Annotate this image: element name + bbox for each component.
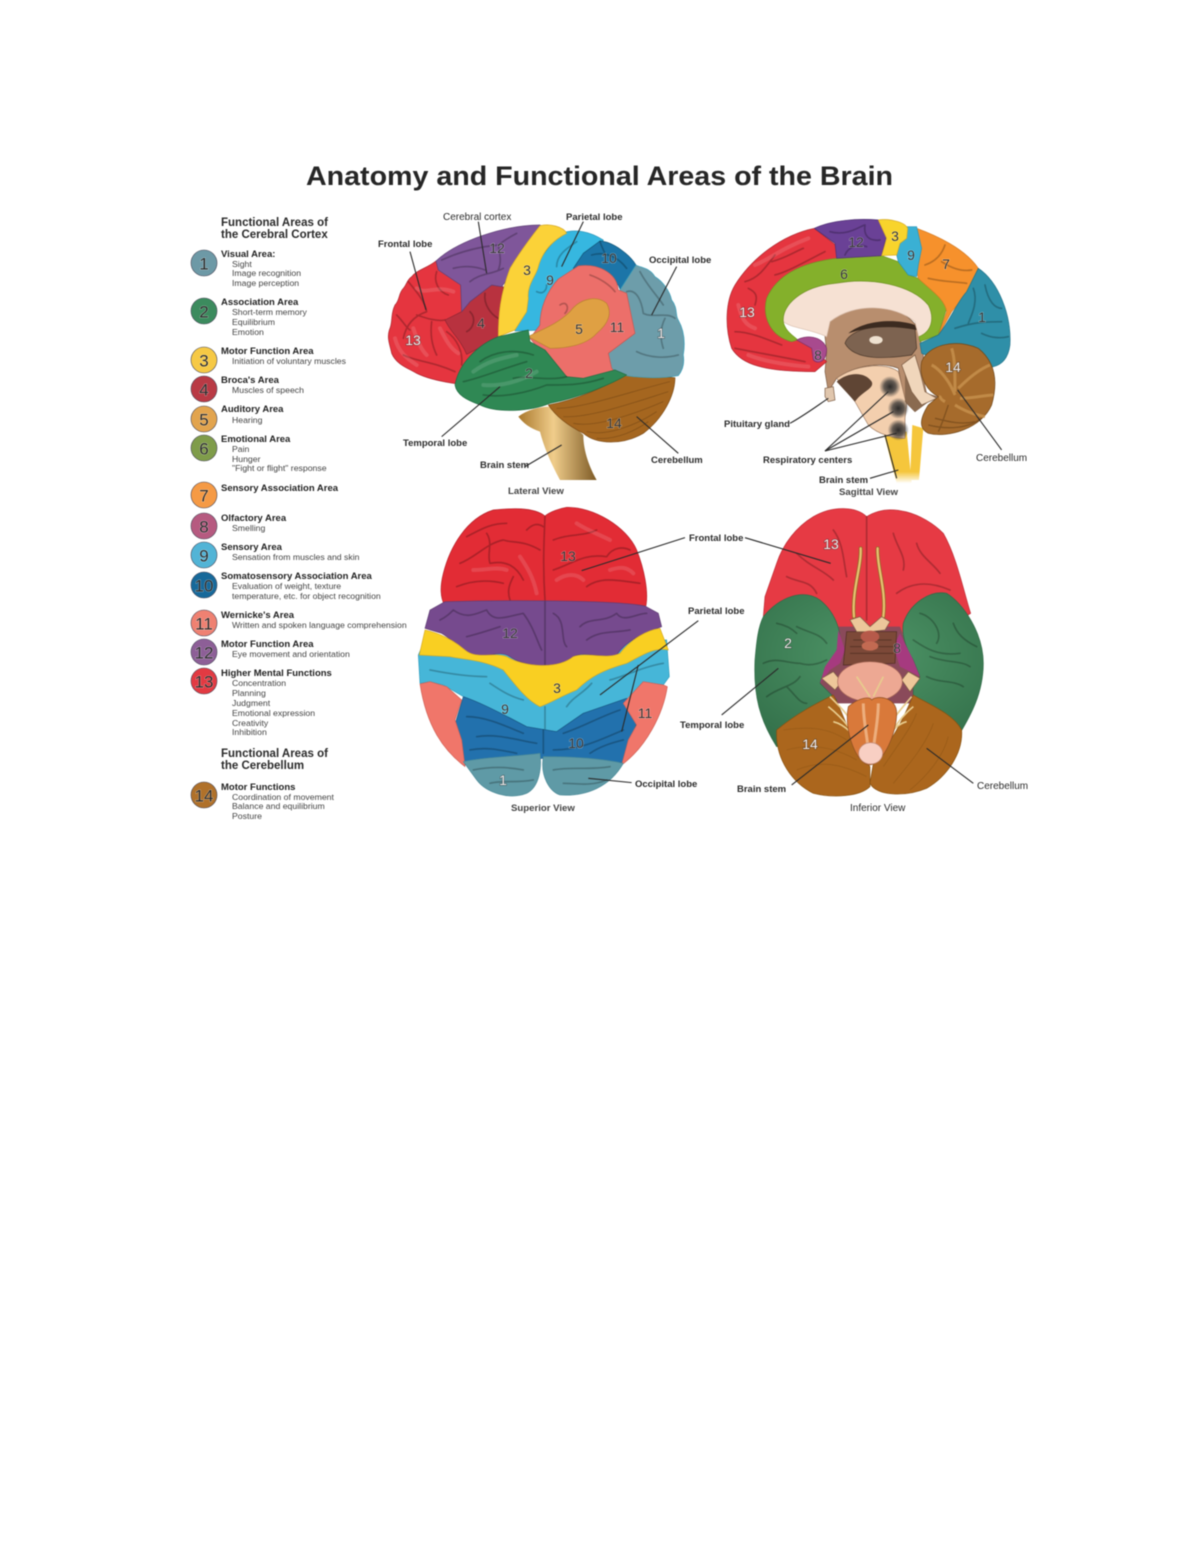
superior labels: Superior View xyxy=(511,803,575,814)
legend item 1: Image perception xyxy=(232,278,299,288)
legend item 13 xyxy=(191,668,332,737)
legend item 11 xyxy=(191,610,407,636)
olfactory region 8 xyxy=(820,630,920,683)
legend item 12: Motor Function Area xyxy=(221,639,314,650)
legend item 13: Judgment xyxy=(232,698,271,708)
legend item 2: Short-term memory xyxy=(232,307,307,317)
legend item 13: Planning xyxy=(232,688,266,698)
legend item 1: Visual Area: xyxy=(221,249,275,260)
motor region 12 xyxy=(425,601,662,665)
legend item 2: 2 xyxy=(199,302,209,322)
inferior labels: Cerebellum xyxy=(977,781,1028,792)
spinal cord xyxy=(883,425,923,483)
legend heading: cerebellum: the Cerebellum xyxy=(221,760,304,772)
legend item 1 xyxy=(191,249,301,288)
superior numbers: 1 xyxy=(499,772,507,788)
Wernicke region 11 xyxy=(530,266,635,379)
lateral labels: Cerebral cortex xyxy=(443,212,511,223)
center underlay xyxy=(819,627,921,703)
legend item 11: Wernicke's Area xyxy=(221,610,295,621)
emotional region 6 xyxy=(765,256,947,342)
inferior view brain xyxy=(722,509,1028,814)
legend item 7 xyxy=(191,482,339,508)
legend item 4: Muscles of speech xyxy=(232,385,304,395)
sagittal labels: Pituitary gland xyxy=(724,419,790,430)
brainstem pons xyxy=(837,366,907,438)
lateral numbers: 11 xyxy=(610,319,624,335)
sensory region 9 xyxy=(418,640,669,732)
frontal region 13 xyxy=(763,509,971,633)
superior labels xyxy=(511,533,744,814)
legend item 2: Association Area xyxy=(221,297,299,308)
superior view brain xyxy=(418,507,744,814)
legend item 5: 5 xyxy=(199,410,209,430)
legend: functional areas key xyxy=(191,217,407,821)
inferior leader lines xyxy=(722,538,973,785)
superior labels: Frontal lobe xyxy=(689,533,743,544)
sagittal numbers: 12 xyxy=(848,234,864,250)
sagittal numbers: 1 xyxy=(978,309,986,325)
legend item 13: Concentration xyxy=(232,678,286,688)
olfactory region 8 xyxy=(797,337,827,362)
legend item 14: Motor Functions xyxy=(221,782,295,793)
olfactory tracts xyxy=(854,548,884,617)
legend item 10: Somatosensory Association Area xyxy=(221,571,373,582)
superior numbers: 12 xyxy=(502,625,518,641)
legend item 6: 6 xyxy=(199,440,209,458)
legend item 8: Smelling xyxy=(232,523,265,533)
pituitary gland xyxy=(825,387,835,402)
sagittal leader lines xyxy=(790,390,1002,478)
legend item 14: Posture xyxy=(232,811,262,821)
legend heading: cerebral cortex: the Cerebral Cortex xyxy=(221,229,328,241)
legend item 3: 3 xyxy=(199,352,209,370)
inferior labels: Brain stem xyxy=(737,784,786,795)
legend item 6: Pain xyxy=(232,444,250,454)
frontal region 13 xyxy=(441,507,647,610)
legend item 13: Emotional expression xyxy=(232,708,315,718)
lateral numbers: 3 xyxy=(523,262,531,278)
legend item 5: Hearing xyxy=(232,415,263,425)
legend item 2: Emotion xyxy=(232,327,264,337)
lateral view brain xyxy=(378,212,711,497)
frontal region 13 xyxy=(388,261,485,384)
superior numbers: 10 xyxy=(568,735,584,751)
legend item 14: 14 xyxy=(195,786,213,806)
legend item 5 xyxy=(191,404,284,432)
association region 7 xyxy=(915,228,978,336)
frontal region 13 xyxy=(727,228,838,372)
sagittal numbers: 7 xyxy=(942,256,950,272)
superior labels: Occipital lobe xyxy=(635,779,697,790)
motor region 3 xyxy=(878,220,908,256)
lateral labels xyxy=(378,212,711,497)
superior labels: Parietal lobe xyxy=(688,606,744,617)
sensory region 9 xyxy=(515,231,603,331)
lateral numbers: 5 xyxy=(575,321,583,337)
legend item 10: 10 xyxy=(195,576,213,596)
somatosensory region 10 xyxy=(573,241,636,297)
legend item 9 xyxy=(191,542,360,568)
occipital region 1 xyxy=(603,265,684,378)
cerebellum region 14 xyxy=(921,344,995,435)
legend heading: cerebellum: Functional Areas of xyxy=(221,748,328,760)
motor region 12 xyxy=(436,225,547,312)
lateral labels: Temporal lobe xyxy=(403,438,467,449)
respiratory center spots xyxy=(879,376,909,441)
legend item 7: Sensory Association Area xyxy=(221,483,339,494)
legend item 13: Higher Mental Functions xyxy=(221,668,332,679)
inferior labels xyxy=(737,781,1028,814)
sagittal numbers: 6 xyxy=(840,266,848,282)
legend item 10: Evaluation of weight, texture xyxy=(232,581,341,591)
lateral numbers: 2 xyxy=(525,365,533,381)
legend item 12 xyxy=(191,639,350,665)
legend item 7: 7 xyxy=(199,486,209,506)
inferior labels: Inferior View xyxy=(850,803,906,814)
legend item 6: "Fight or flight" response xyxy=(232,463,327,473)
legend item 8: Olfactory Area xyxy=(221,513,287,524)
legend item 11: 11 xyxy=(195,614,213,634)
legend item 9: Sensation from muscles and skin xyxy=(232,552,360,562)
inferior numbers: 13 xyxy=(823,536,839,552)
superior leader lines xyxy=(582,538,698,783)
legend item 8: 8 xyxy=(199,518,209,536)
lateral numbers: 12 xyxy=(489,240,505,256)
lateral leader lines xyxy=(410,222,678,467)
lateral labels: Occipital lobe xyxy=(649,255,711,266)
legend item 12: 12 xyxy=(195,644,213,662)
optic chiasm xyxy=(850,617,890,632)
legend item 6: Emotional Area xyxy=(221,434,291,445)
motor region 3 xyxy=(498,225,567,337)
Wernicke region 11 xyxy=(420,682,667,767)
lateral labels: Brain stem xyxy=(480,460,529,471)
legend item 13: 13 xyxy=(195,672,213,692)
temporal poles xyxy=(822,672,920,692)
sagittal numbers: 9 xyxy=(907,247,915,263)
sagittal numbers xyxy=(739,228,986,375)
sagittal numbers: 14 xyxy=(945,359,961,375)
lateral numbers: 1 xyxy=(657,325,665,341)
legend item 2: Equilibrium xyxy=(232,317,275,327)
motor region 12 xyxy=(814,219,887,258)
superior numbers: 3 xyxy=(553,680,561,696)
legend item 4: Broca's Area xyxy=(221,375,280,386)
sagittal numbers: 13 xyxy=(739,304,755,320)
sagittal numbers: 8 xyxy=(814,347,822,363)
superior numbers: 11 xyxy=(638,705,652,721)
temporal region 2 xyxy=(755,593,983,747)
lateral labels: Frontal lobe xyxy=(378,239,432,250)
brain stem xyxy=(518,407,597,480)
legend item 14: Coordination of movement xyxy=(232,792,334,802)
cerebellum region 14 xyxy=(548,373,675,442)
lateral labels: Lateral View xyxy=(508,486,564,497)
inferior numbers: 8 xyxy=(893,640,901,656)
superior numbers xyxy=(499,548,652,788)
nerves xyxy=(828,677,913,732)
inferior numbers: 2 xyxy=(784,635,792,651)
motor region 3 xyxy=(419,628,668,707)
legend item 3 xyxy=(191,346,347,373)
pons xyxy=(838,662,902,702)
sagittal labels: Brain stem xyxy=(819,475,868,486)
legend item 5: Auditory Area xyxy=(221,404,284,415)
central tan structures xyxy=(825,305,928,412)
legend item 13: Inhibition xyxy=(232,727,267,737)
legend item 14 xyxy=(191,782,334,821)
legend heading: cerebral cortex: Functional Areas of xyxy=(221,217,328,229)
medulla xyxy=(847,698,897,765)
sagittal labels: Sagittal View xyxy=(839,487,899,498)
legend item 1: Sight xyxy=(232,259,252,269)
sagittal labels: Cerebellum xyxy=(976,453,1027,464)
legend item 2 xyxy=(191,297,307,337)
legend item 6: Hunger xyxy=(232,454,261,464)
legend item 3: Motor Function Area xyxy=(221,346,314,357)
sagittal numbers: 3 xyxy=(891,228,899,244)
legend item 9: 9 xyxy=(199,546,209,566)
superior numbers: 9 xyxy=(501,701,509,717)
cerebellum region 14 xyxy=(777,695,962,796)
superior numbers: 13 xyxy=(560,548,576,564)
inferior numbers xyxy=(784,536,901,752)
temporal region 2 xyxy=(455,330,627,410)
legend item 4: 4 xyxy=(199,380,209,400)
superior labels: Temporal lobe xyxy=(680,720,744,731)
lateral numbers: 14 xyxy=(606,415,622,431)
legend item 1: Image recognition xyxy=(232,268,301,278)
occipital region 1 xyxy=(463,753,623,796)
legend item 14: Balance and equilibrium xyxy=(232,801,325,811)
hypothalamus xyxy=(843,632,897,665)
legend item 4 xyxy=(191,375,304,402)
sagittal labels: Respiratory centers xyxy=(763,455,852,466)
lateral labels: Parietal lobe xyxy=(566,212,622,223)
cream corpus callosum xyxy=(783,281,932,338)
legend item 12: Eye movement and orientation xyxy=(232,649,350,659)
legend item 1: 1 xyxy=(199,254,209,274)
Broca region 4 xyxy=(445,285,503,354)
legend item 11: Written and spoken language comprehension xyxy=(232,620,407,630)
lateral numbers: 10 xyxy=(601,250,617,266)
lateral numbers xyxy=(405,240,665,431)
title: Anatomy and Functional Areas of the Brain xyxy=(306,161,893,191)
legend item 6 xyxy=(191,434,327,473)
lateral numbers: 13 xyxy=(405,332,421,348)
sagittal labels xyxy=(724,419,1027,498)
inferior numbers: 14 xyxy=(802,736,818,752)
somatosensory region 10 xyxy=(453,697,640,765)
lateral numbers: 9 xyxy=(546,272,554,288)
sensory region 9 xyxy=(897,227,922,277)
legend item 9: Sensory Area xyxy=(221,542,283,553)
legend item 13: Creativity xyxy=(232,718,269,728)
legend item 8 xyxy=(191,513,287,539)
legend item 3: Initiation of voluntary muscles xyxy=(232,356,347,366)
legend item 10: temperature, etc. for object recognition xyxy=(232,591,381,601)
occipital region 1 xyxy=(920,268,1010,372)
sagittal view brain xyxy=(724,219,1027,498)
auditory region 5 xyxy=(528,299,609,348)
legend item 10 xyxy=(191,571,381,601)
lateral numbers: 4 xyxy=(477,315,485,331)
lateral labels: Cerebellum xyxy=(651,455,703,466)
